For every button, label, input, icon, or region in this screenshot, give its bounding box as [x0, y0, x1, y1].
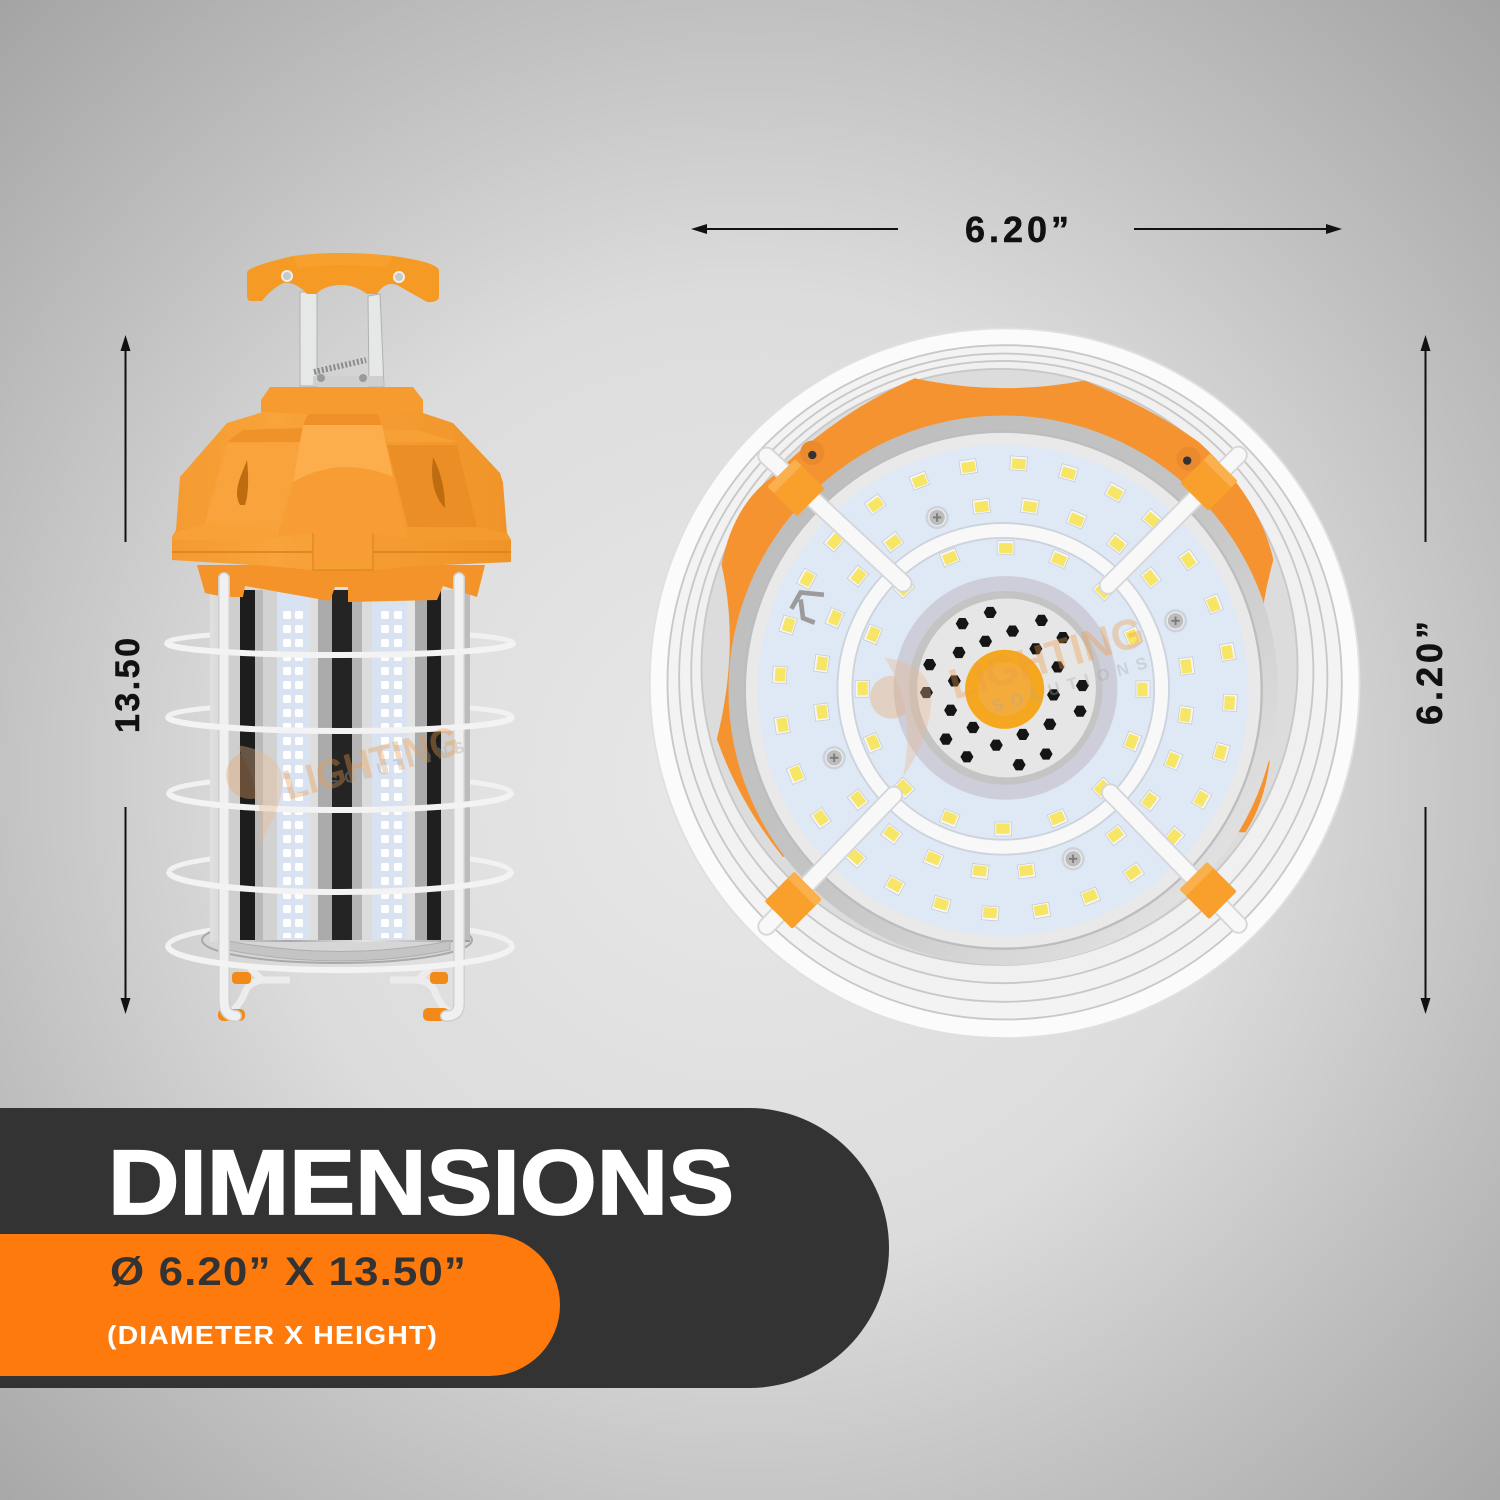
front of cage rings [167, 643, 513, 970]
dimensions caption: (DIAMETER X HEIGHT) [107, 1320, 438, 1350]
lower rim [172, 523, 277, 540]
orange sub banner [0, 1234, 560, 1376]
inner bright rim [745, 432, 1262, 949]
arrow: up [1420, 335, 1430, 542]
label: 6.20 width: 6.20” [965, 209, 1069, 250]
orange dome [172, 412, 511, 570]
back of cage rings [167, 631, 513, 970]
arrow: right [1134, 224, 1342, 234]
dimension: right height [1409, 335, 1450, 1014]
arrow: down [120, 807, 130, 1014]
label: 13.50 height: 13.50 [109, 638, 147, 733]
product: top view work light [650, 328, 1360, 1038]
orange skirt [197, 565, 485, 602]
arrow: left [691, 224, 898, 234]
screws [823, 506, 1187, 870]
LED cylinder [210, 590, 470, 942]
arrow: down [1420, 807, 1430, 1014]
label: 6.20 height: 6.20” [1409, 621, 1450, 725]
bottom cap ring [228, 941, 450, 961]
watermark: lighting solutions on top view: LIGHTING [944, 608, 1150, 709]
centre panel [303, 414, 382, 425]
cross wires [767, 455, 1238, 926]
central hub [894, 576, 1117, 800]
orange top collar [261, 387, 423, 425]
product: side view work light [167, 253, 513, 1021]
handle spring bracket [300, 292, 384, 386]
cable coils [650, 328, 1360, 1038]
vent slots [237, 460, 248, 505]
housing mounts [800, 441, 1201, 471]
dark title banner [0, 1108, 889, 1388]
orange housing [717, 378, 1273, 857]
watermark: lighting solutions on side view: LIGHTING [278, 717, 464, 809]
arrow: up [120, 335, 130, 542]
title: DIMENSIONS [108, 1132, 734, 1234]
dimension: left height [109, 335, 147, 1014]
inner LED ring [855, 541, 1150, 836]
dimensions value: Ø 6.20” X 13.50” [110, 1250, 467, 1294]
base plate [202, 917, 472, 963]
vertical cage wires [224, 578, 459, 1016]
left facet [227, 428, 303, 442]
middle LED ring [814, 498, 1195, 879]
base feet [218, 968, 452, 1021]
right facet [383, 430, 458, 442]
watermark: lighting solutions on top view: SOLUTIONS [990, 653, 1149, 716]
outer LED ring [772, 456, 1237, 921]
watermark: lighting solutions on side view [226, 717, 467, 845]
orange wire clips [765, 453, 1238, 929]
watermark: lighting solutions on top view [870, 608, 1150, 776]
watermark: lighting solutions on side view: SOLUTIONS [327, 739, 467, 792]
inner wire ring [845, 530, 1162, 847]
orange centre button [965, 650, 1044, 729]
LED circuit board [758, 445, 1249, 936]
spring clip [791, 592, 824, 623]
orange handle [247, 253, 439, 302]
silver reflector ring [728, 415, 1278, 965]
ventilation holes [920, 607, 1089, 770]
dimension: top width [691, 209, 1342, 250]
